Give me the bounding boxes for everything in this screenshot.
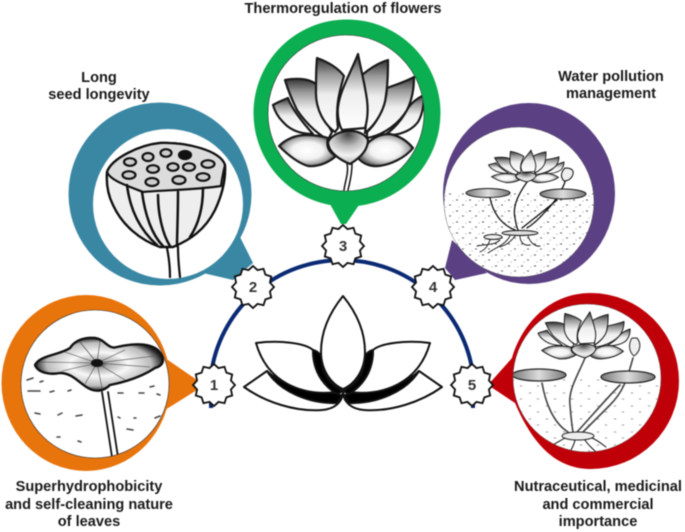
label: superhydrophobicity: of leaves [58,514,120,530]
label: superhydrophobicity: Superhydrophobicity [16,479,163,495]
number badge 4: 4 [429,279,438,296]
inner circle outline [444,127,594,277]
number badge 1: 1 [210,377,218,394]
illustration: lotus plant in water [444,150,594,283]
panel: nutraceutical, medicinal and commercial importance [488,293,679,469]
number badge 3 [322,225,364,267]
number badge 5 [451,364,493,406]
illustration: lotus leaf [21,310,169,458]
label: thermoregulation: Thermoregulation of flowers [244,1,442,17]
label: superhydrophobicity: and self-cleaning nature [5,497,173,513]
central lotus logo [244,296,442,410]
red callout bubble [488,293,679,469]
number badge 5: 5 [468,377,476,394]
illustration: lotus seed pod [107,143,225,277]
label: seed longevity: seed longevity [48,87,151,103]
label: water pollution: management [566,86,656,102]
panel: thermoregulation of flowers [254,20,440,224]
label: nutraceutical: and commercial [542,497,654,513]
panel: seed longevity [68,102,253,286]
orange callout bubble [2,295,197,471]
panel: superhydrophobicity of leaves [2,295,197,471]
label: seed longevity: Long [81,70,117,86]
number badge 2 [232,266,274,308]
green callout bubble [254,20,440,224]
number badge 1 [193,364,235,406]
teal callout bubble [68,102,253,286]
inner circle outline [21,310,169,458]
label: water pollution: Water pollution [558,69,664,85]
panel: water pollution management [443,103,615,284]
illustration: lotus flower [273,54,424,190]
inner circle outline [513,304,661,452]
number badge 2: 2 [249,279,257,296]
number badge 4 [412,266,454,308]
label: nutraceutical: importance [559,514,637,530]
illustration: lotus plant with leaves [511,312,663,455]
purple callout bubble [443,103,615,284]
semicircular arc connector [211,260,473,408]
label: nutraceutical: Nutraceutical, medicinal [514,479,682,495]
number badge 3: 3 [339,238,347,255]
